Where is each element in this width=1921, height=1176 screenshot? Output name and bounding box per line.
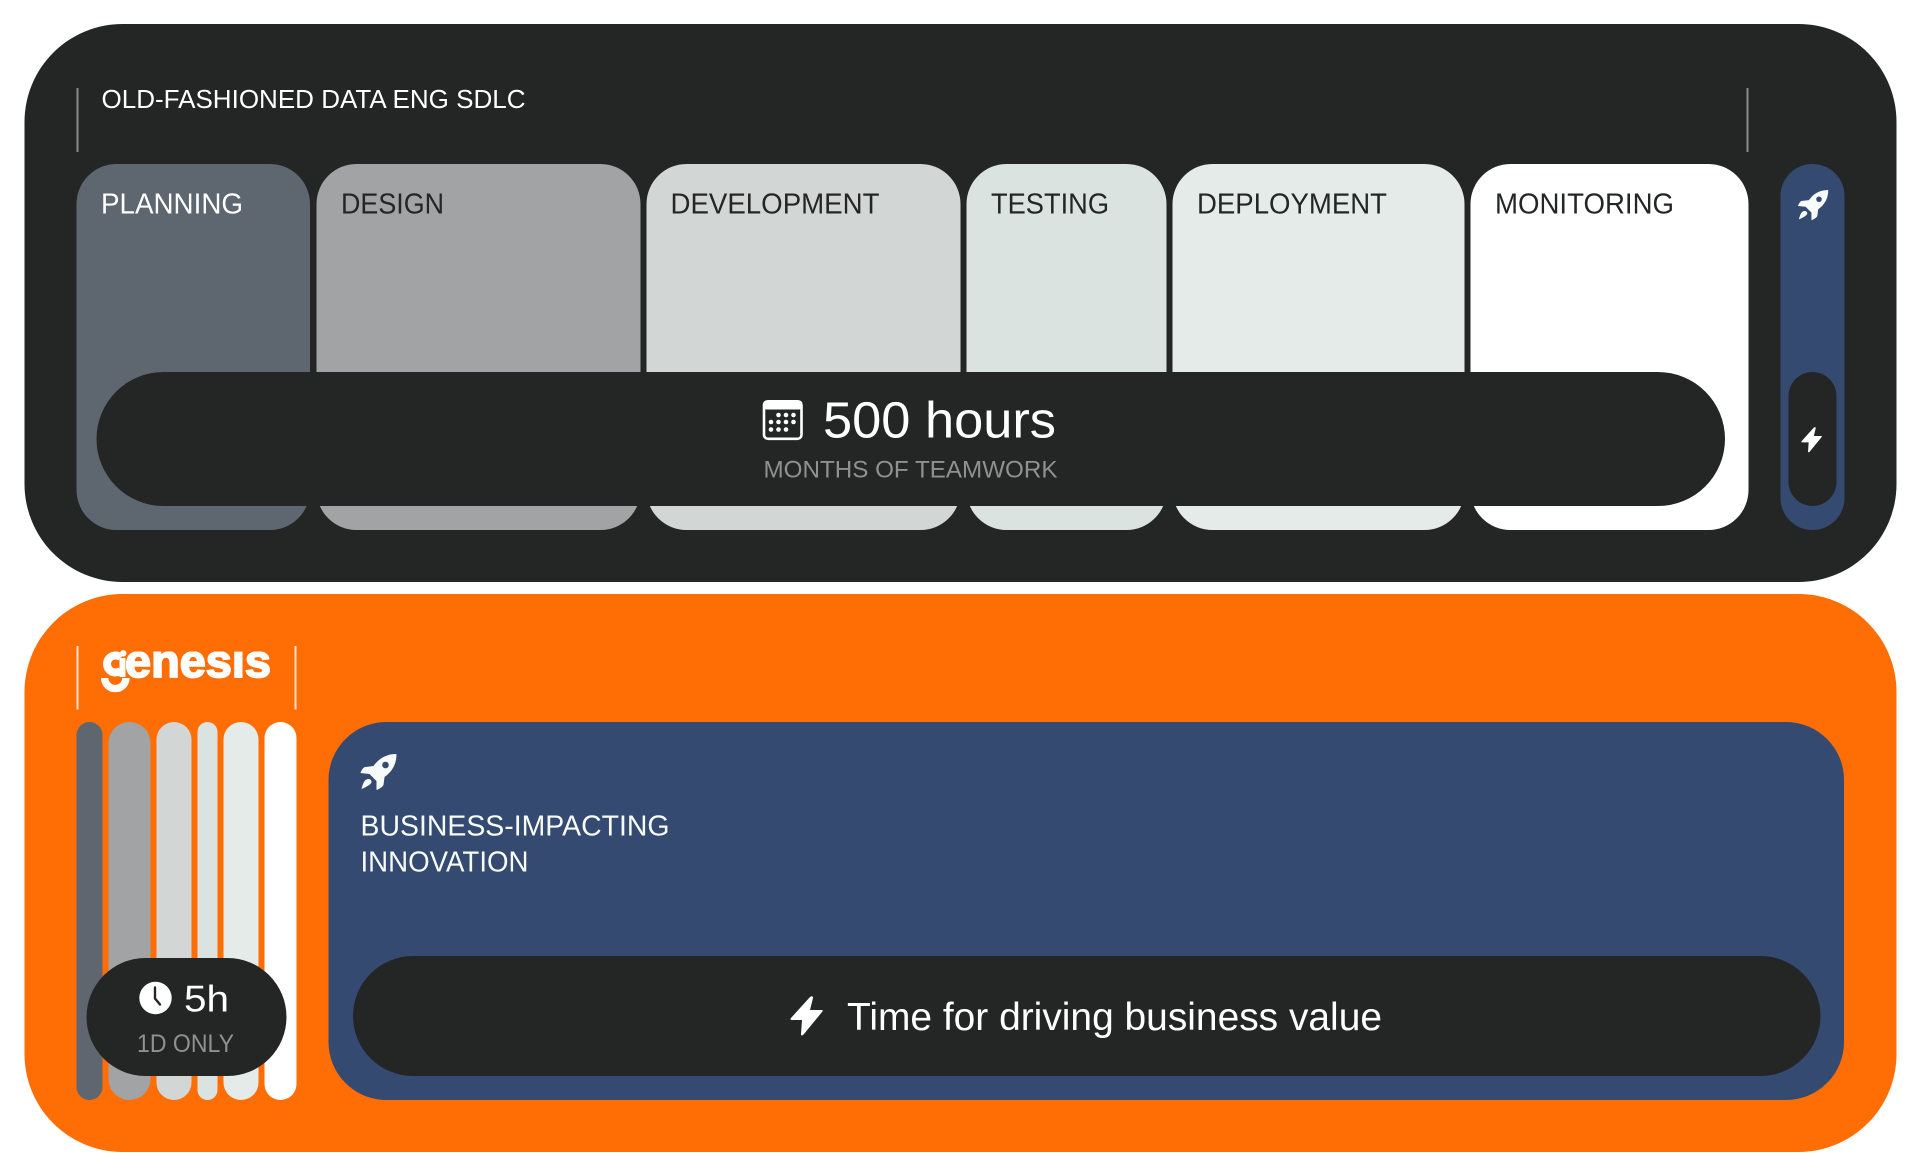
stat: 500 hours: 500 hours: [823, 392, 1056, 448]
callout: 5h, 1D only: [86, 958, 286, 1076]
heading: business-impacting innovation: [360, 811, 670, 879]
card: monitoring: [1470, 164, 1748, 530]
heading: old-fashioned data eng SDLC: OLD-FASHIONED DATA ENG SDLC: [102, 84, 526, 114]
icon: rocket: [360, 754, 396, 790]
heading: business-impacting innovation: INNOVATION: [360, 847, 528, 879]
panel background: [24, 594, 1896, 1152]
logo: genesis: [76, 646, 296, 710]
callout: time for driving business value: [353, 956, 1820, 1076]
card: testing: TESTING: [991, 188, 1109, 220]
icon: lightning bolt: [790, 996, 823, 1036]
label: time for driving business value: Time for driving business value: [847, 996, 1382, 1039]
card: deployment: [1172, 164, 1464, 530]
card: deployment: DEPLOYMENT: [1197, 188, 1387, 220]
card: development: DEVELOPMENT: [670, 188, 880, 220]
card: design: DESIGN: [341, 188, 444, 220]
compressed SDLC stripes: [76, 722, 296, 1100]
card: monitoring: MONITORING: [1495, 188, 1674, 220]
card: development: [646, 164, 960, 530]
icon: rocket: [1798, 190, 1828, 220]
panel background: [24, 24, 1896, 582]
logo: genesis: enesis: [125, 635, 271, 687]
card: design: [316, 164, 640, 530]
icon: clock: [139, 982, 172, 1014]
label: months of teamwork: MONTHS OF TEAMWORK: [764, 456, 1058, 484]
card: planning: [76, 164, 310, 530]
panel: business-impacting innovation: [328, 722, 1844, 1100]
card: testing: [966, 164, 1166, 530]
panel: old-fashioned data eng SDLC: [24, 24, 1896, 582]
inner pill with bolt icon: [1788, 372, 1836, 506]
column: innovation sliver: [1780, 164, 1844, 530]
callout: 500 hours, months of teamwork: [96, 372, 1725, 506]
card: planning: PLANNING: [101, 188, 243, 220]
panel: genesis: [24, 594, 1896, 1152]
label: 1D only: 1D ONLY: [137, 1030, 234, 1058]
icon: calendar: [763, 400, 802, 439]
stat: 5h: 5h: [184, 979, 229, 1020]
heading: business-impacting innovation: BUSINESS-IMPACTING: [360, 811, 670, 843]
